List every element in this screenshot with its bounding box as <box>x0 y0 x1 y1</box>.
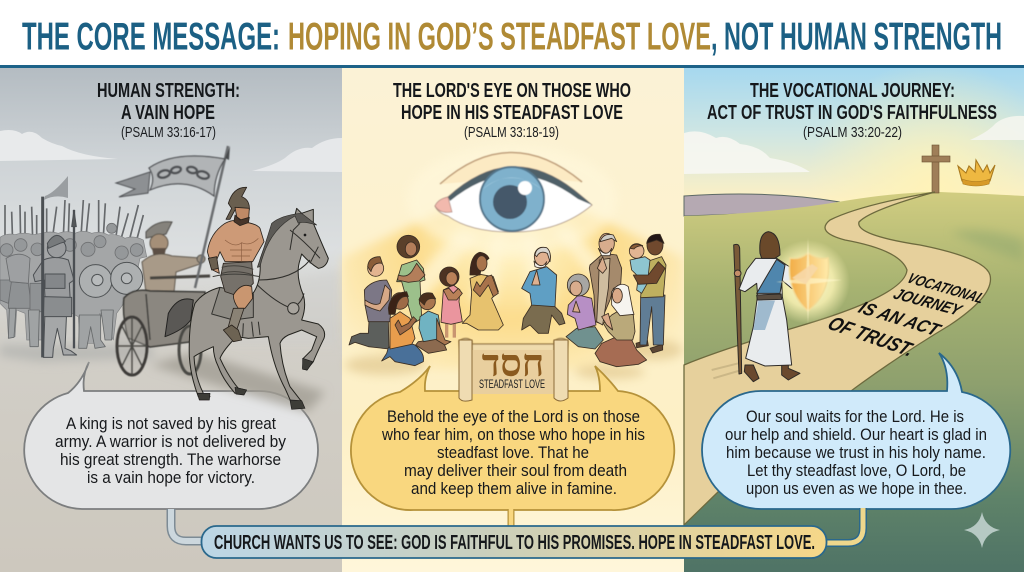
callout: the Lord's eye: may deliver their soul from death <box>404 461 627 480</box>
road text <box>823 271 988 361</box>
person: girl in pink dress <box>440 267 462 338</box>
ground shadows under worshippers <box>345 340 683 379</box>
banner: church wants us to see <box>202 526 826 558</box>
chariot driver <box>142 222 210 292</box>
callout: human strength: army. A warrior is not delivered by <box>55 432 286 451</box>
panel: human strength <box>0 68 342 572</box>
ground shadows <box>0 345 325 412</box>
icon: banner with broken chain <box>116 146 230 288</box>
small flag <box>44 176 68 200</box>
heading: the Lord's eye <box>393 80 631 141</box>
icon: sparkle star <box>964 512 1000 548</box>
callout: vocational journey: Let thy steadfast love, O Lord, be <box>747 461 966 480</box>
panel: vocational journey <box>684 68 1024 572</box>
icon: crown <box>958 160 995 186</box>
person: woman in green dress <box>397 235 425 323</box>
road text: VOCATIONAL <box>904 271 988 307</box>
person: woman in yellow dress <box>462 252 503 330</box>
icon: hesed scroll <box>459 338 568 401</box>
person: man holding child <box>629 234 666 353</box>
callout: the Lord's eye: Behold the eye of the Lord is on those <box>387 407 640 426</box>
icon: eye of the Lord <box>435 152 592 232</box>
callout: the Lord's eye: who fear him, on those who hope in his <box>381 425 645 444</box>
callout: human strength: is a vain hope for victory. <box>87 468 255 487</box>
scroll front and lettering: STEADFAST LOVE <box>479 379 545 391</box>
icon: shield glow <box>766 240 850 324</box>
heading: the Lord's eye: (PSALM 33:18-19) <box>464 125 559 141</box>
callout: human strength <box>24 362 318 509</box>
heading: the Lord's eye: THE LORD'S EYE ON THOSE WHO <box>393 80 631 102</box>
callout: the Lord's eye: and keep them alive in famine. <box>411 479 617 498</box>
foreground soldier <box>33 197 77 357</box>
callout: vocational journey: Our soul waits for the Lord. He is <box>746 407 964 426</box>
icon: cross <box>922 145 950 193</box>
heading: human strength: A VAIN HOPE <box>121 102 215 124</box>
callout: vocational journey: him because we trust in his holy name. <box>726 443 986 462</box>
callout: vocational journey: upon us even as we hope in thee. <box>746 479 967 498</box>
person: grey-haired woman <box>566 274 603 349</box>
heading: vocational journey <box>707 80 997 141</box>
road text: JOURNEY <box>890 286 966 320</box>
person: older man in blue sweater <box>522 247 565 333</box>
person: girl in orange shirt <box>382 292 424 366</box>
connector: left callout to banner <box>171 509 204 541</box>
icon: warhorse <box>165 208 328 409</box>
heading: human strength: (PSALM 33:16-17) <box>121 125 216 141</box>
icon: glowing shield <box>776 238 842 324</box>
heading: vocational journey: (PSALM 33:20-22) <box>803 125 902 141</box>
group: kneeling worshippers right <box>522 233 666 367</box>
scroll front and lettering: חסד <box>482 343 544 385</box>
callout: human strength: A king is not saved by his great <box>66 414 276 433</box>
person: woman in hijab <box>595 284 647 367</box>
icon: round shields <box>79 262 143 297</box>
warrior rider <box>207 187 264 342</box>
connector: right callout to banner <box>824 508 863 543</box>
person: kneeling boy <box>349 257 392 349</box>
callout: vocational journey: our help and shield. Our heart is glad in <box>725 425 987 444</box>
winding road <box>684 192 990 525</box>
title: HOPING IN GOD’S STEADFAST LOVE <box>288 16 711 58</box>
person: boy in teal shirt <box>416 293 451 353</box>
person: elder with beard and robe <box>589 233 622 325</box>
header rule <box>0 65 1024 68</box>
connector: middle callout to banner <box>508 509 514 528</box>
group: kneeling worshippers left <box>349 235 503 366</box>
scroll front and lettering <box>459 340 568 401</box>
heading: human strength: HUMAN STRENGTH: <box>97 80 240 102</box>
chariot <box>117 290 205 375</box>
heading: human strength <box>97 80 240 141</box>
header band <box>0 0 1024 65</box>
callout: the Lord's eye <box>351 366 674 510</box>
figure: traveller with staff <box>712 232 807 382</box>
callout: vocational journey <box>702 353 1010 509</box>
callout: human strength: his great strength. The warhorse <box>60 450 281 469</box>
road text: IS AN ACT <box>855 297 946 340</box>
heading: the Lord's eye: HOPE IN HIS STEADFAST LOVE <box>401 102 623 124</box>
panel: the Lord's eye <box>342 68 684 572</box>
title: THE CORE MESSAGE: <box>22 16 280 58</box>
army of soldiers <box>0 197 147 357</box>
road text: OF TRUST. <box>823 314 919 361</box>
callout: the Lord's eye: steadfast love. That he <box>437 443 589 462</box>
